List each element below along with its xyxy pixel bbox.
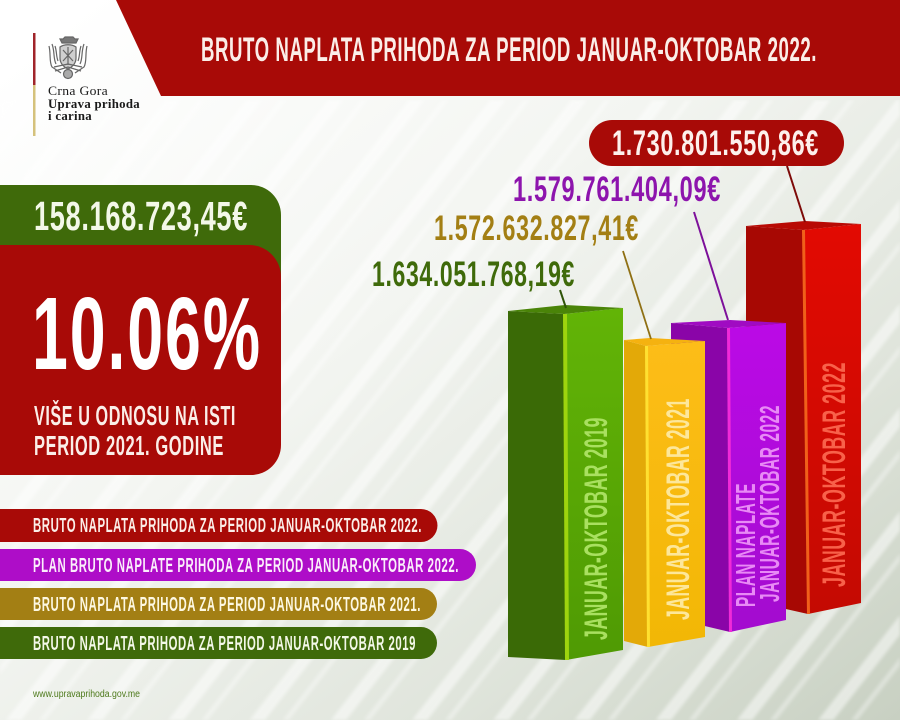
leader line: 2022 [787, 166, 805, 222]
value label: plan 2022: 1.579.761.404,09€ [513, 170, 721, 209]
bar: January-October 2019: JANUAR-OKTOBAR 2019 [578, 417, 614, 640]
icon: coat of arms [49, 37, 87, 78]
percentage caption: PERIOD 2021. GODINE [34, 430, 224, 461]
panel: difference amount [0, 185, 281, 280]
bar chart [508, 221, 861, 660]
logo [33, 33, 140, 136]
bar: plan 2022: JANUAR-OKTOBAR 2022 [754, 405, 785, 602]
percentage caption [34, 399, 236, 461]
bar: January-October 2019 [508, 305, 623, 660]
bar: plan 2022: PLAN NAPLATE [730, 483, 761, 607]
value label: 2021: 1.572.632.827,41€ [434, 209, 639, 248]
legend: 2021 collection [0, 588, 437, 620]
website: www.upravaprihoda.gov.me [32, 689, 140, 700]
legend: 2022 collection [0, 509, 437, 542]
bar: plan 2022 [671, 320, 786, 632]
value label: 2019: 1.634.051.768,19€ [372, 255, 575, 294]
legend: 2021 collection: BRUTO NAPLATA PRIHODA ZA PERIOD JANUAR-OKTOBAR 2021. [33, 594, 421, 616]
leader line: 2021 [623, 251, 651, 339]
legend: 2022 plan [0, 549, 476, 581]
callout: 2022 value [589, 120, 844, 166]
bar: January-October 2022: JANUAR-OKTOBAR 2022 [816, 362, 852, 587]
leader line: plan [694, 212, 728, 320]
logo text: Uprava prihoda [48, 96, 140, 111]
header banner [116, 0, 900, 96]
percentage caption: VIŠE U ODNOSU NA ISTI [34, 399, 236, 431]
bar: January-October 2021 [624, 338, 705, 647]
logo text: i carina [48, 108, 92, 123]
legend: 2022 plan: PLAN BRUTO NAPLATE PRIHODA ZA PERIOD JANUAR-OKTOBAR 2022. [33, 555, 459, 577]
percentage value: 10.06% [32, 276, 262, 391]
bar: January-October 2022 [746, 221, 861, 614]
legend: 2019 collection [0, 627, 437, 659]
legend: 2019 collection: BRUTO NAPLATA PRIHODA ZA PERIOD JANUAR-OKTOBAR 2019 [33, 633, 416, 655]
amount text: 158.168.723,45€ [34, 193, 248, 239]
legend: 2022 collection: BRUTO NAPLATA PRIHODA ZA PERIOD JANUAR-OKTOBAR 2022. [33, 515, 422, 537]
leader line: 2019 [560, 290, 566, 308]
panel: percentage [0, 245, 281, 475]
logo text [48, 83, 140, 123]
logo text: Crna Gora [48, 83, 108, 98]
bar: January-October 2021: JANUAR-OKTOBAR 2021 [660, 398, 696, 620]
